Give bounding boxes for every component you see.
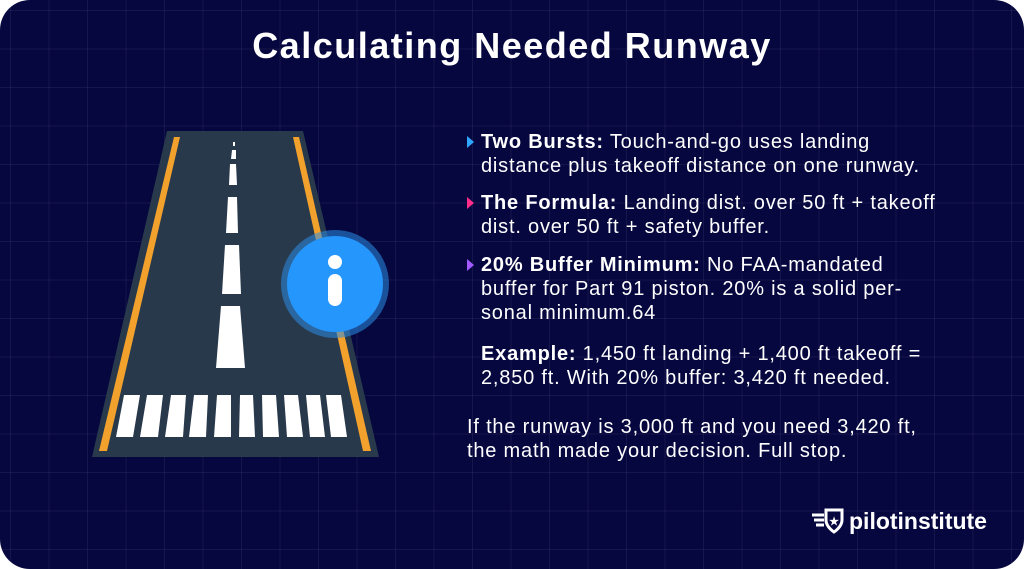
bullet: 20% buffer	[467, 254, 902, 324]
example text: 2,850 ft. With 20% buffer: 3,420 ft needed.	[481, 367, 891, 389]
bullet: 20% buffer: buffer for Part 91 piston. 20% is a solid per-	[481, 278, 902, 300]
icon: info circle	[281, 230, 389, 338]
example text	[481, 343, 921, 389]
bullet: two bursts: distance plus takeoff distance on one runway.	[481, 155, 920, 177]
conclusion text: If the runway is 3,000 ft and you need 3,420 ft,	[467, 416, 917, 438]
logo: pilotinstitute: ★	[829, 516, 839, 528]
bullet: 20% buffer: sonal minimum.64	[481, 302, 656, 324]
bullet: two bursts: Two Bursts: Touch-and-go uses landing	[481, 131, 870, 153]
bullet: the formula	[467, 192, 936, 238]
logo: pilotinstitute: pilotinstitute	[849, 508, 987, 534]
bullet: the formula: The Formula: Landing dist. over 50 ft + takeoff	[481, 192, 936, 214]
title: Calculating Needed Runway	[252, 25, 772, 66]
runway illustration	[92, 131, 379, 457]
conclusion text	[467, 416, 917, 462]
bullet: the formula: dist. over 50 ft + safety buffer.	[481, 216, 770, 238]
bullet: two bursts	[467, 131, 920, 177]
conclusion text: the math made your decision. Full stop.	[467, 440, 847, 462]
example text: Example: 1,450 ft landing + 1,400 ft takeoff =	[481, 343, 921, 365]
bullet: 20% buffer: 20% Buffer Minimum: No FAA-mandated	[481, 254, 884, 276]
